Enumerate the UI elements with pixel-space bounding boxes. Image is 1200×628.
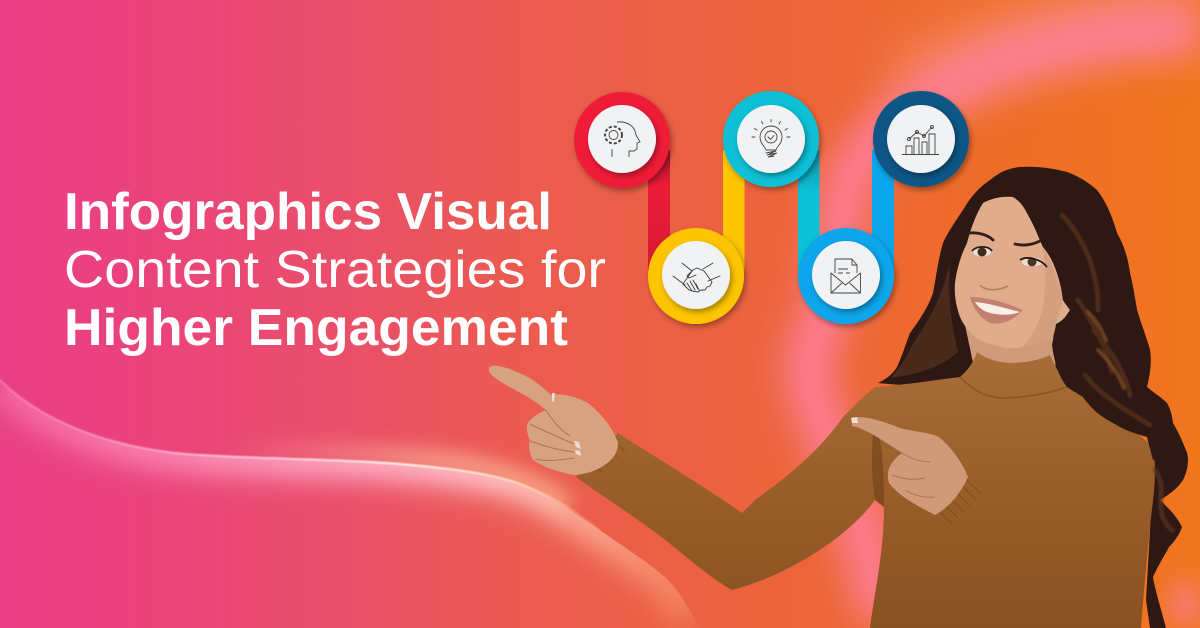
title line 1: Infographics Visual — [64, 183, 552, 241]
connector: red — [648, 150, 670, 270]
bright curve line — [0, 380, 600, 530]
hair front — [1013, 170, 1187, 460]
turtleneck fold — [960, 377, 1067, 398]
salmon glow top right — [900, 14, 1196, 95]
left hand fingers — [530, 410, 574, 461]
peach halo above the curve — [230, 452, 570, 508]
title — [64, 183, 606, 357]
face shading — [1022, 247, 1063, 347]
sweater body and arm — [576, 352, 1155, 628]
face — [955, 197, 1070, 348]
title line 3: Higher Engagement — [64, 299, 568, 357]
hair back — [878, 167, 1188, 628]
connector: teal — [798, 150, 820, 270]
eyes — [972, 247, 1047, 267]
nose — [980, 285, 1008, 290]
pink glow band — [808, 30, 1198, 620]
left cuff ribbing — [590, 438, 625, 472]
icon: handshake — [673, 263, 720, 292]
connector: yellow — [723, 150, 744, 270]
neck — [965, 320, 1056, 372]
process flow diagram — [574, 91, 969, 324]
node: teal bulb — [723, 91, 819, 187]
wave glow — [0, 380, 690, 616]
right hand — [852, 417, 968, 515]
icon: light bulb — [752, 120, 790, 157]
node: red head — [574, 92, 670, 188]
left hand nails — [552, 393, 581, 456]
left hair lock tint — [890, 260, 958, 378]
teeth — [975, 302, 1020, 315]
node: yellow handshake — [648, 228, 744, 324]
mouth — [970, 297, 1023, 324]
node: blue envelope — [798, 228, 894, 324]
right hand nail — [851, 417, 858, 423]
pink glow bottom right — [1172, 582, 1200, 626]
right hand fingers — [892, 453, 935, 497]
hair highlights — [1062, 215, 1172, 530]
icon: head with gear — [605, 122, 640, 157]
woman pointing — [489, 167, 1188, 628]
arm shadow — [872, 420, 884, 507]
left hand — [489, 366, 618, 475]
connector: blue — [872, 150, 894, 270]
title line 2: Content Strategies for — [64, 241, 606, 299]
node: navy chart — [873, 91, 969, 187]
right cuff ribbing — [938, 480, 981, 524]
icon: bar chart — [902, 126, 939, 154]
icon: envelope with document — [831, 259, 860, 293]
eyebrows — [970, 233, 1040, 245]
soft glow below the curve — [0, 380, 690, 616]
